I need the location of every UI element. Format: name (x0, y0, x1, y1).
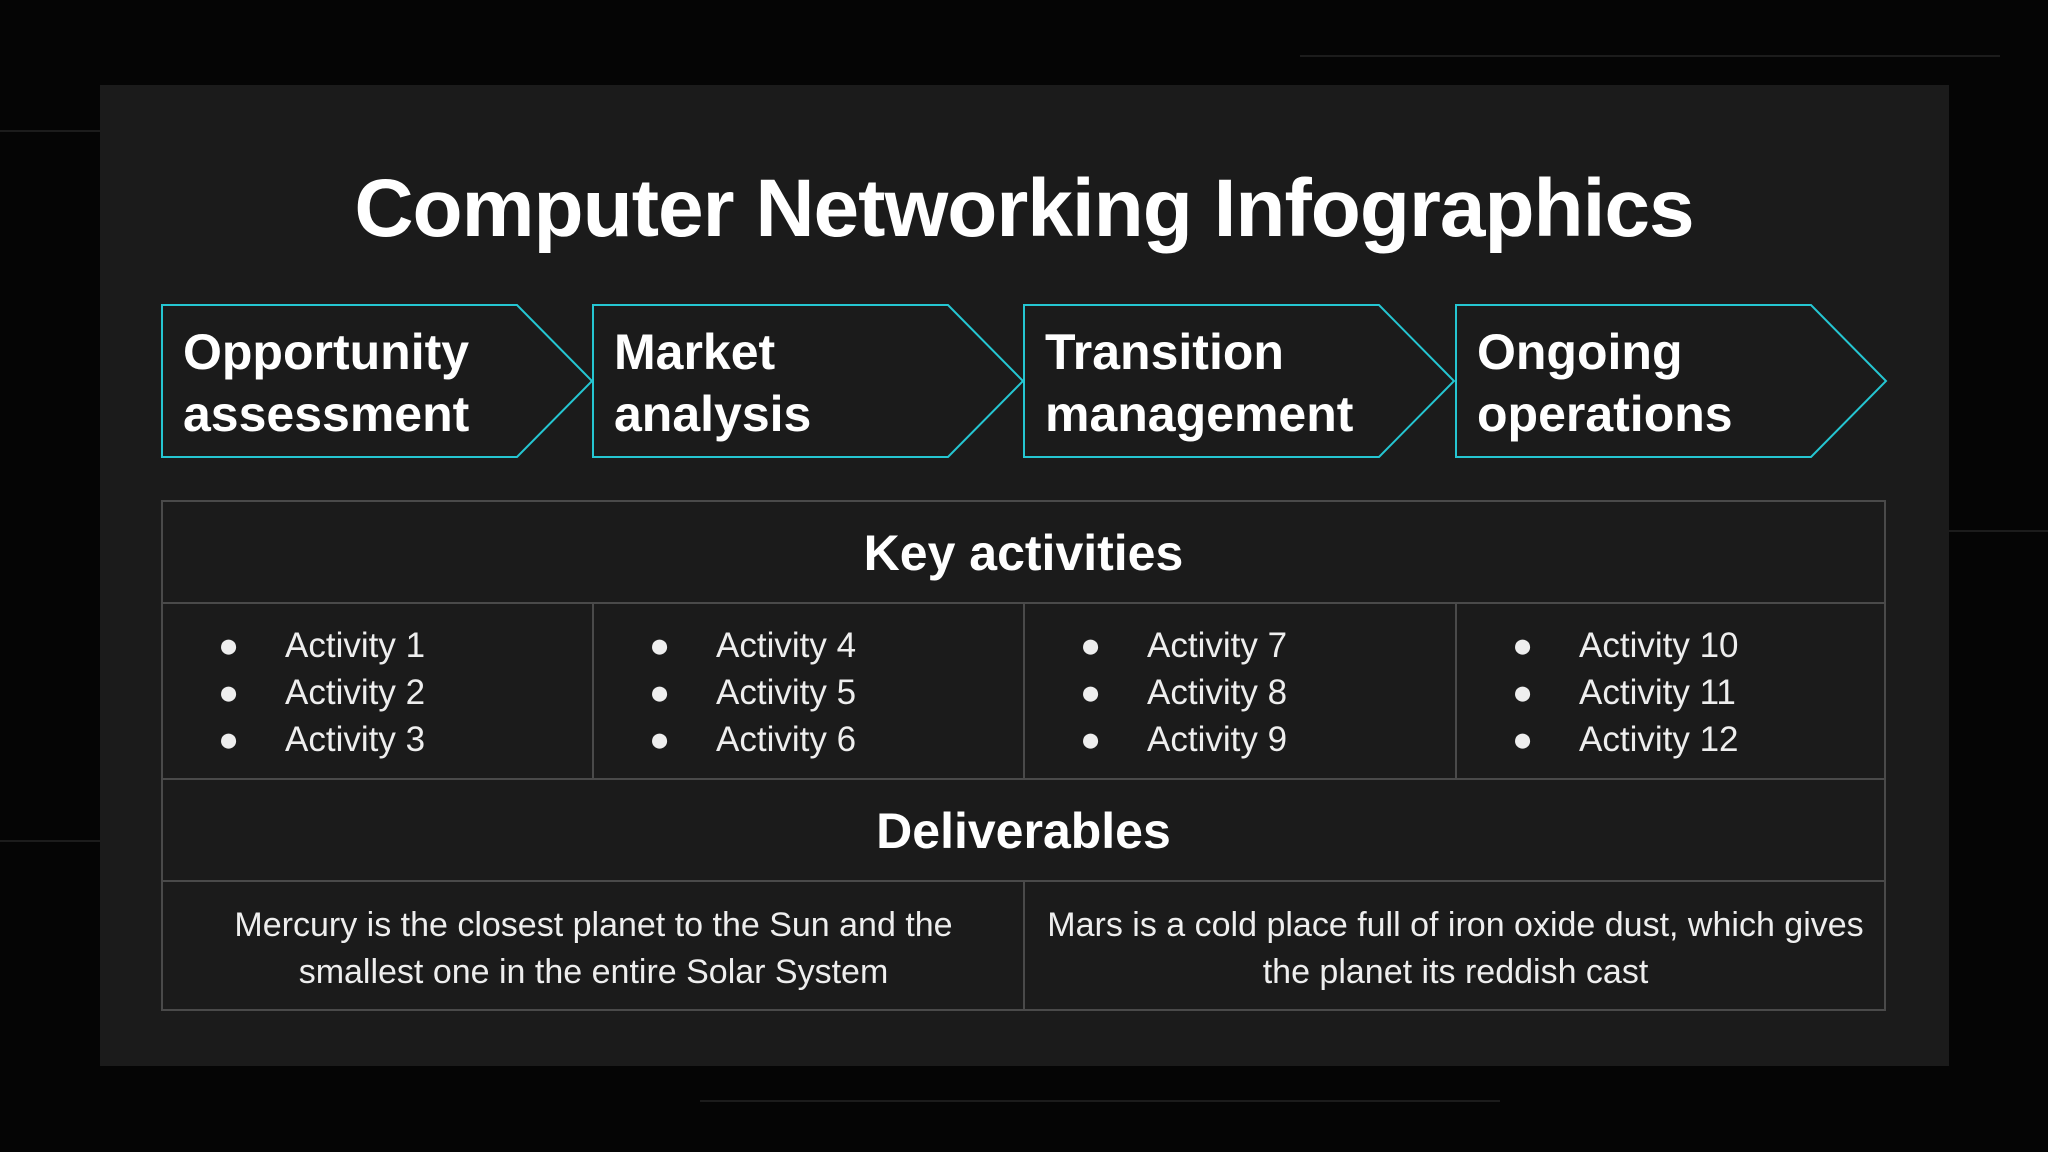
activities column 4: Activity 10 (1579, 626, 1738, 665)
deliverable: mars (1047, 906, 1864, 991)
chevron: market analysis: analysis (614, 386, 811, 442)
activities column 3: ● (1080, 720, 1101, 759)
activities column 2: Activity 6 (716, 720, 856, 759)
deliverable: mars: the planet its reddish cast (1263, 953, 1648, 991)
activities column 4: ● (1512, 720, 1533, 759)
activities column 1 (218, 626, 425, 759)
activities column 1: Activity 3 (285, 720, 425, 759)
panel: main (100, 85, 1949, 1066)
chevron: opportunity assessment: Opportunity (183, 324, 469, 380)
chevron: ongoing operations (1455, 304, 1888, 458)
chevron: transition management: Transition (1045, 324, 1284, 380)
activities column 3: Activity 9 (1147, 720, 1287, 759)
activities column 4: Activity 12 (1579, 720, 1738, 759)
activities column 1: ● (218, 720, 239, 759)
activities column 3: Activity 8 (1147, 673, 1287, 712)
chevron: market analysis: Market (614, 324, 775, 380)
activities column 2: Activity 4 (716, 626, 856, 665)
activities column 2: ● (649, 720, 670, 759)
heading: key activities: Key activities (864, 525, 1183, 581)
chevron: transition management (1023, 304, 1455, 458)
deliverable: mercury: smallest one in the entire Solar System (299, 953, 888, 991)
activities column 3: ● (1080, 626, 1101, 665)
chevron: ongoing operations: Ongoing (1477, 324, 1682, 380)
table (161, 500, 1886, 1011)
activities column 1: Activity 2 (285, 673, 425, 712)
activities column 1: ● (218, 673, 239, 712)
activities column 4 (1512, 626, 1738, 759)
activities column 3: ● (1080, 673, 1101, 712)
activities column 1: Activity 1 (285, 626, 425, 665)
deliverable: mars: Mars is a cold place full of iron oxide dust, which gives (1047, 906, 1864, 944)
activities column 4: Activity 11 (1579, 673, 1736, 712)
activities column 4: ● (1512, 626, 1533, 665)
title: Computer Networking Infographics (354, 163, 1694, 254)
deliverable: mercury: Mercury is the closest planet to the Sun and the (234, 906, 953, 944)
activities column 3 (1080, 626, 1287, 759)
chevron: market analysis (592, 304, 1023, 458)
chevron: ongoing operations: operations (1477, 386, 1733, 442)
activities column 2: Activity 5 (716, 673, 856, 712)
chevron: opportunity assessment: assessment (183, 386, 469, 442)
activities column 3: Activity 7 (1147, 626, 1287, 665)
activities column 4: ● (1512, 673, 1533, 712)
chevron: transition management: management (1045, 386, 1353, 442)
chevron: opportunity assessment (161, 304, 592, 458)
activities column 1: ● (218, 626, 239, 665)
activities column 2: ● (649, 626, 670, 665)
activities column 2: ● (649, 673, 670, 712)
activities column 2 (649, 626, 856, 759)
deliverable: mercury (234, 906, 953, 991)
heading: deliverables: Deliverables (876, 803, 1171, 859)
